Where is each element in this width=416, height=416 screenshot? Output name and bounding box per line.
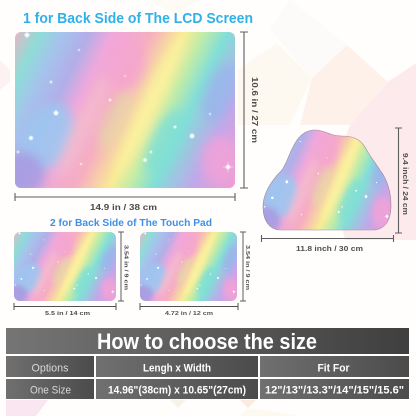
table title bar <box>6 328 409 354</box>
panel: LCD screen skin <box>15 32 235 188</box>
dimension: LCD width: 14.9 in / 38 cm <box>90 202 158 212</box>
dimension: LCD height: 10.6 in / 27 cm <box>250 77 260 143</box>
table row: one size: 12"/13"/13.3"/14"/15"/15.6" <box>265 384 404 396</box>
dimension: LCD height <box>240 32 260 188</box>
table title bar: How to choose the size <box>97 329 317 354</box>
heading: LCD screen: 1 for Back Side of The LCD Screen <box>23 10 253 27</box>
dimension: pad 2 height: 3.54 in / 9 cm <box>244 245 250 290</box>
dimension: pad 2 width: 4.72 in / 12 cm <box>165 311 213 317</box>
panel: touch pad skin 1 <box>14 232 116 301</box>
heading: touch pad: 2 for Back Side of The Touch Pad <box>50 217 212 229</box>
dimension: pad 2 height <box>240 232 250 301</box>
table row: one size: One Size <box>30 384 71 396</box>
panel: cloud mouse pad <box>262 130 392 230</box>
dimension: pad 2 width <box>140 303 238 317</box>
table row: header: Options <box>32 362 69 374</box>
panel: touch pad skin 2 <box>140 232 237 301</box>
dimension: pad 1 height <box>118 232 128 301</box>
dimension: cloud width: 11.8 inch / 30 cm <box>296 244 363 253</box>
dimension: cloud width <box>262 235 394 253</box>
table: how to choose the size <box>6 328 409 399</box>
dimension: cloud height: 9.4 inch / 24 cm <box>401 153 410 215</box>
table row: header: Fit For <box>318 362 350 374</box>
table row: one size: 14.96"(38cm) x 10.65"(27cm) <box>108 384 246 396</box>
dimension: pad 1 width <box>14 303 116 317</box>
dimension: pad 1 height: 3.54 in / 9 cm <box>122 245 128 290</box>
table row: header <box>6 356 409 377</box>
dimension: LCD width <box>15 193 235 212</box>
table row: one size <box>6 379 409 399</box>
table row: header: Lengh x Width <box>143 362 211 374</box>
dimension: pad 1 width: 5.5 in / 14 cm <box>45 311 90 317</box>
dimension: cloud height <box>395 128 410 233</box>
